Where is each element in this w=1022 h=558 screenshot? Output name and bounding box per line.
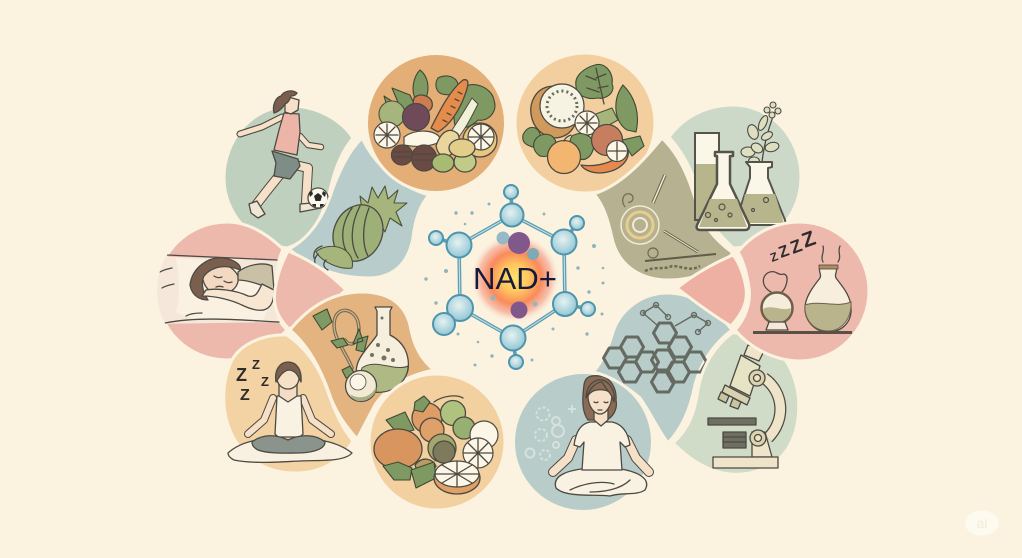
panel: pink wedge left: [274, 251, 346, 329]
particles: [424, 202, 604, 366]
icon: round flask left: [762, 272, 792, 330]
panel: pink wedge right: [677, 255, 746, 326]
icon: meditating woman: [553, 376, 649, 496]
icon: fruit pile: [374, 396, 498, 494]
icon: vegetables and fruit: [374, 70, 497, 172]
text: z letters: Z: [777, 242, 792, 262]
inner spheres: [490, 232, 539, 318]
icon: flasks and plant: [695, 102, 785, 230]
panel: microscope: [673, 333, 799, 474]
panel: vegetables bowl: [366, 54, 506, 192]
shelf: [753, 331, 852, 334]
icon: hexagon network: [604, 302, 710, 392]
icon: bulb flask right: [805, 246, 851, 332]
panel: pineapple plant: [289, 138, 429, 278]
watermark badge: ai: [977, 515, 987, 531]
icon: soccer player: [240, 91, 328, 218]
bonds: [436, 192, 588, 362]
icon: meditating woman with z letters: Z: [240, 387, 250, 404]
text: z letters: Z: [799, 227, 819, 253]
icon: sleeping woman: [150, 255, 279, 324]
icon: meditating woman with z letters: Z: [252, 357, 260, 372]
icon: meditating woman with z letters: Z: [236, 365, 247, 385]
icon: lab apparatus: [621, 175, 716, 271]
panel: vine and flask: [290, 292, 434, 439]
panel: fruit and greens: [515, 53, 655, 193]
icon: meditating woman with z letters: [228, 357, 352, 462]
panel: sleep and flasks right: [735, 222, 869, 361]
icon: coconut and leaves: [523, 65, 644, 174]
panel: device: [594, 138, 733, 280]
text: z letters: [768, 227, 819, 265]
panel: molecule structure: [593, 293, 732, 443]
panel: sleeping person: [150, 222, 287, 360]
title: NAD+: NAD+: [473, 262, 557, 296]
icon: vine and round flask: [313, 307, 408, 402]
icon: microscope: [708, 345, 780, 468]
panel: citrus and apples: [369, 374, 505, 510]
icon: faint bubbles: [526, 405, 576, 460]
panel: meditation with Z: [224, 335, 353, 473]
text: z letters: Z: [768, 249, 780, 265]
panel: soccer exercise: [224, 91, 353, 248]
glow: [470, 233, 560, 323]
icon: pineapple: [314, 186, 407, 270]
text: z letters: Z: [788, 235, 805, 258]
panel: meditation bubbles: [514, 372, 652, 512]
icon: meditating woman with z letters: Z: [261, 374, 269, 389]
central molecule: [424, 185, 604, 369]
atoms: [429, 185, 595, 369]
watermark badge: [965, 510, 999, 536]
panel: lab flasks: [669, 102, 801, 248]
